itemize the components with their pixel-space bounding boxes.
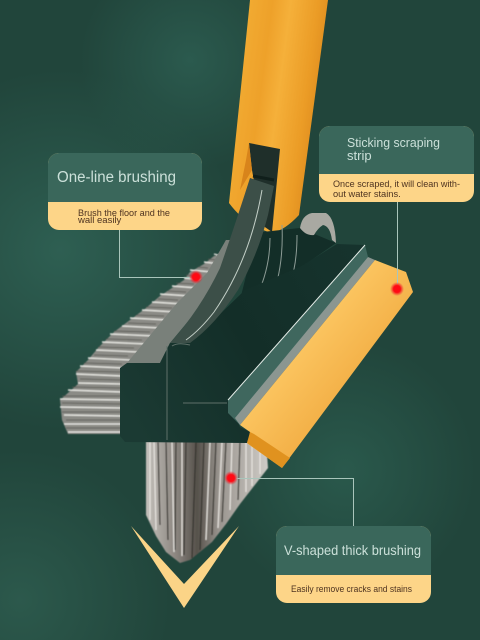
icon: brush head body (120, 244, 365, 443)
callout: sticking scraping strip: Once scraped, it will clean with- (333, 179, 460, 189)
icon: fins behind scraper (240, 213, 336, 302)
icon: scraper blade (228, 245, 413, 468)
icon: upper bristle row (60, 240, 230, 434)
callout: sticking scraping strip: out water stains. (333, 189, 401, 199)
callout: sticking scraping strip: strip (347, 148, 372, 163)
marker dots (189, 270, 404, 485)
connector lines (120, 202, 398, 526)
callout: one-line brushing: One-line brushing (57, 169, 176, 186)
icon: gray strip above bristles (127, 240, 240, 363)
icon: orange handle (229, 0, 328, 233)
callout: one-line brushing: Brush the floor and the (78, 208, 170, 219)
callout: one-line brushing (48, 153, 202, 230)
callout: v-shaped thick brushing: V-shaped thick brushing (284, 542, 421, 558)
callout: v-shaped thick brushing (276, 526, 431, 603)
icon: brush neck arm (167, 176, 274, 440)
icon: lower bristle block (146, 440, 268, 563)
callout: v-shaped thick brushing: Easily remove cracks and stains (291, 584, 412, 594)
callout: sticking scraping strip (319, 126, 474, 202)
icon: V-shaped down arrow (131, 526, 239, 608)
callout: sticking scraping strip: Sticking scraping (347, 135, 440, 150)
callout: one-line brushing: wall easily (77, 215, 122, 226)
